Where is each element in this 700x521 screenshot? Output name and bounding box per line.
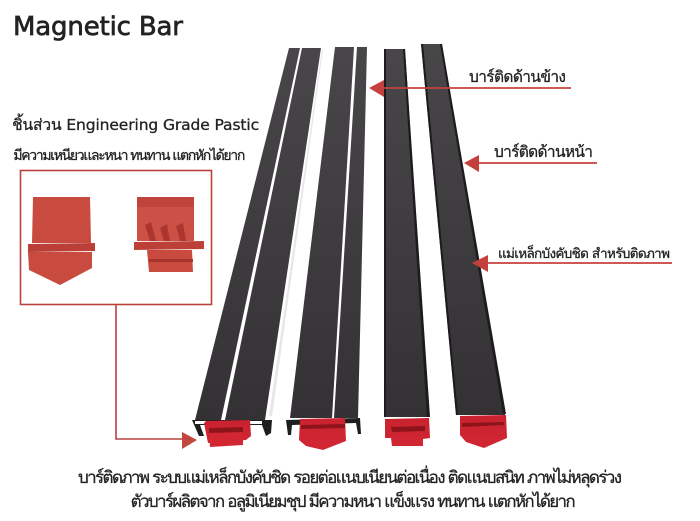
text: description: บาร์ติดภาพ ระบบแม่เหล็กบังคับชิด รอยต่อแนบเนียนต่อเนื่อง ติดแนบสนิท ภาพไม่หลุดร่วง <box>78 465 622 488</box>
text: description <box>78 465 622 512</box>
arrow: side-mount bar <box>369 80 571 97</box>
icon: red end cap <box>460 415 507 448</box>
arrow: magnet <box>472 255 672 272</box>
arrow: from parts panel to bar cap <box>116 305 197 449</box>
bar: side-mount left <box>192 48 323 447</box>
label: side-mount bar: บาร์ติดด้านข้าง <box>469 68 566 86</box>
bar: front-mount right <box>421 44 507 448</box>
bar: front-mount left <box>384 49 430 446</box>
icon: red end cap <box>204 420 251 447</box>
label: front-mount bar: บาร์ติดด้านหน้า <box>494 143 593 161</box>
text: description: ตัวบาร์ผลิตจาก อลูมิเนียมชุป มีความหนา แข็งแรง ทนทาน แตกหักได้ยาก <box>131 490 576 512</box>
icon: red end cap <box>299 418 346 450</box>
label: magnet: แม่เหล็กบังคับชิด สำหรับติดภาพ <box>498 244 670 262</box>
text: plastic properties: มีความเหนียวและหนา ทนทาน แตกหักได้ยาก <box>13 147 245 164</box>
arrow: front-mount bar <box>464 155 597 172</box>
icon: plastic end cap, clipped <box>134 197 204 272</box>
panel: plastic parts close-up <box>20 170 212 304</box>
bar: side-mount right <box>286 47 367 450</box>
title: Magnetic Bar <box>13 12 183 42</box>
icon: red end cap <box>385 418 430 446</box>
heading: engineering grade plastic parts: ชิ้นส่วน Engineering Grade Pastic <box>12 113 259 134</box>
icon: plastic end cap, pointed <box>28 197 95 285</box>
